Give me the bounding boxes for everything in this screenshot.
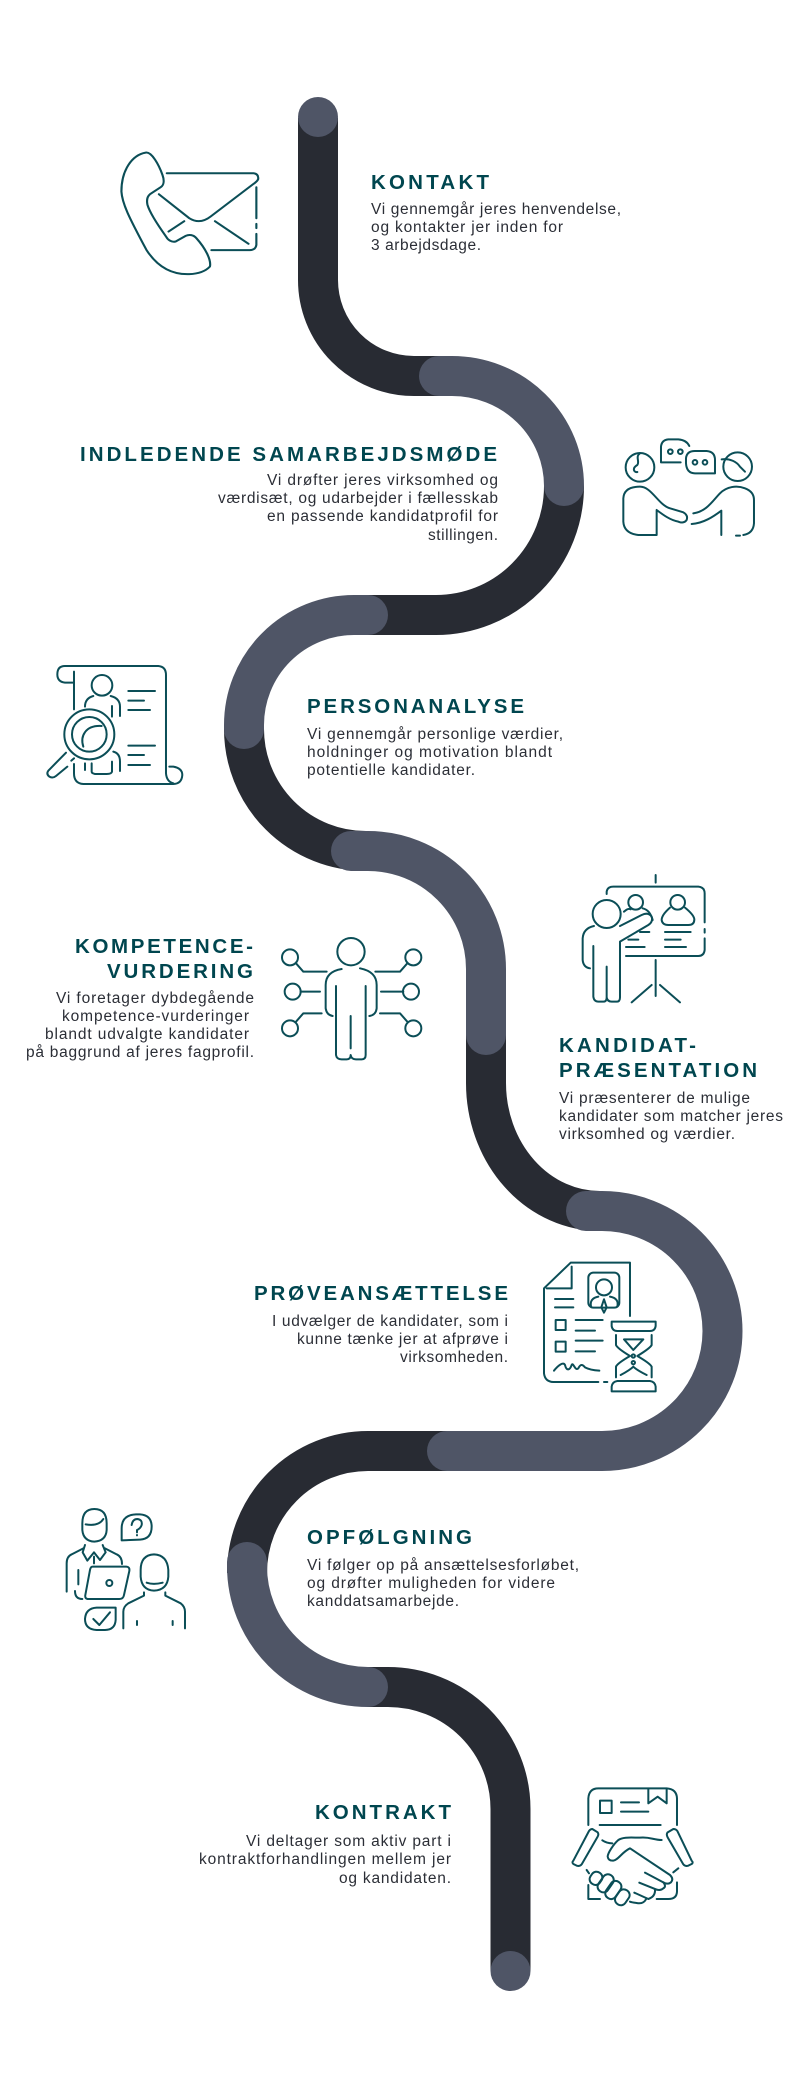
step 5: præsentation text (559, 1090, 783, 1143)
step 5: præsentation heading: PRÆSENTATION (559, 1059, 757, 1082)
step 6: prøveansættelse text: kunne tænke jer at afprøve i (297, 1331, 508, 1348)
step 7: opfølgning text: kanddatsamarbejde. (307, 1593, 459, 1610)
step 5: præsentation icon (583, 875, 705, 1002)
step 7: opfølgning heading: OPFØLGNING (307, 1526, 472, 1549)
step 3: personanalyse heading: PERSONANALYSE (307, 695, 524, 718)
step 8: kontrakt icon (572, 1788, 693, 1907)
step 4: kompetence heading (75, 935, 253, 983)
step 7: opfølgning text: Vi følger op på ansættelsesforløbet, (307, 1557, 579, 1574)
step 2: meeting icon (623, 439, 754, 536)
step 8: kontrakt text (199, 1833, 451, 1887)
step 6: prøveansættelse text: I udvælger de kandidater, som i (272, 1313, 508, 1330)
step 5: præsentation heading: KANDIDAT- (559, 1034, 696, 1057)
step 6: prøveansættelse heading: PRØVEANSÆTTELSE (254, 1282, 508, 1305)
step 2: samarbejdsmøde text: Vi drøfter jeres virksomhed og (267, 472, 498, 489)
step 6: prøveansættelse text (272, 1313, 508, 1366)
end cap (490, 1951, 530, 1991)
step 1: kontakt icon (121, 153, 258, 274)
step 7: opfølgning icon (67, 1509, 185, 1630)
step 1: kontakt text: 3 arbejdsdage. (371, 237, 481, 254)
step 2: samarbejdsmøde heading: INDLEDENDE SAMARBEJDSMØDE (80, 443, 497, 466)
step 8: kontrakt text: Vi deltager som aktiv part i (246, 1833, 451, 1850)
step 7: opfølgning text (307, 1557, 579, 1610)
step 5: præsentation text: Vi præsenterer de mulige (559, 1090, 750, 1107)
step 5: præsentation text: kandidater som matcher jeres (559, 1108, 783, 1125)
step 2: samarbejdsmøde text: værdisæt, og udarbejder i fællesskab (218, 490, 498, 507)
step 3: personanalyse text: Vi gennemgår personlige værdier, (307, 726, 563, 743)
step 2: samarbejdsmøde text: stillingen. (428, 527, 498, 544)
winding road (244, 97, 723, 1991)
dark road segments (244, 118, 600, 1971)
step 4: kompetence icon (282, 938, 421, 1059)
step 5: præsentation heading (559, 1034, 757, 1082)
step 8: kontrakt heading: KONTRAKT (315, 1801, 451, 1824)
step 3: personanalyse text: holdninger og motivation blandt (307, 744, 553, 761)
step 4: kompetence text: blandt udvalgte kandidater (45, 1026, 249, 1043)
step 8: kontrakt text: kontraktforhandlingen mellem jer (199, 1851, 451, 1868)
step 2: samarbejdsmøde text: en passende kandidatprofil for (267, 508, 498, 525)
start cap (298, 97, 338, 137)
step 4: kompetence text: kompetence-vurderinger (62, 1008, 249, 1025)
step 1: kontakt text: og kontakter jer inden for (371, 219, 563, 236)
step 7: opfølgning text: og drøfter muligheden for videre (307, 1575, 555, 1592)
light road segments (244, 376, 723, 1687)
step 4: kompetence text: Vi foretager dybdegående (56, 990, 254, 1007)
step 8: kontrakt text: og kandidaten. (339, 1870, 451, 1887)
step 6: prøveansættelse text: virksomheden. (400, 1349, 508, 1366)
step 3: personanalyse icon (47, 666, 182, 784)
step 1: kontakt text: Vi gennemgår jeres henvendelse, (371, 201, 621, 218)
step 3: personanalyse text: potentielle kandidater. (307, 762, 475, 779)
step 4: kompetence heading: VURDERING (107, 960, 253, 983)
step 4: kompetence text: på baggrund af jeres fagprofil. (26, 1044, 254, 1061)
step 4: kompetence text (26, 990, 254, 1061)
step 3: personanalyse text (307, 726, 563, 779)
step 2: samarbejdsmøde text (218, 472, 498, 544)
step 4: kompetence heading: KOMPETENCE- (75, 935, 253, 958)
step 1: kontakt heading: KONTAKT (371, 171, 489, 194)
step 1: kontakt text (371, 201, 621, 254)
step 6: prøveansættelse icon (544, 1263, 656, 1391)
step 5: præsentation text: virksomhed og værdier. (559, 1126, 735, 1143)
